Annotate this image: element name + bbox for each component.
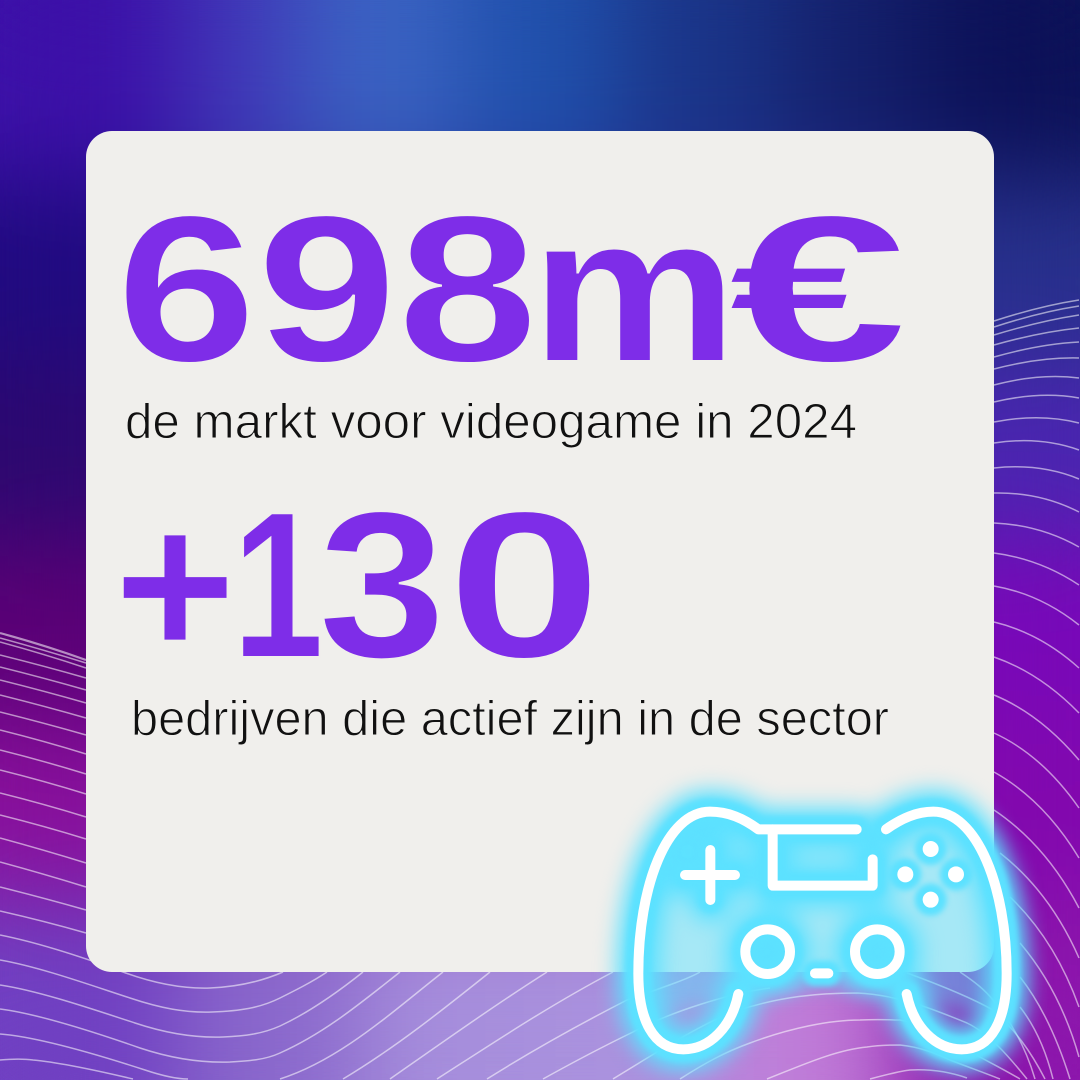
stat: 698m€: 698 — [116, 173, 538, 406]
stat: +130: 0 — [447, 469, 602, 702]
label: de markt voor videogame in 2024: de markt voor videogame in 2024 — [125, 395, 857, 449]
stat: +130: 1 — [232, 469, 324, 702]
controller white neon lines — [638, 812, 1007, 1049]
controller tight halo — [638, 812, 1007, 1049]
controller inner glow — [638, 812, 1007, 1020]
controller wide glow — [638, 812, 1007, 1049]
controller buttons — [897, 841, 964, 908]
stat: 698m€: € — [728, 173, 908, 406]
stat: +130: 3 — [318, 469, 446, 702]
card background — [86, 131, 994, 972]
label: bedrijven die actief zijn in de sector: bedrijven die actief zijn in de sector — [131, 692, 889, 746]
stat: +130: + — [114, 469, 236, 702]
background wave lines — [0, 300, 1079, 1079]
stat: 698m€: m — [530, 173, 738, 406]
icon: neon game controller — [638, 812, 1007, 1049]
panel: stats card — [86, 131, 994, 972]
